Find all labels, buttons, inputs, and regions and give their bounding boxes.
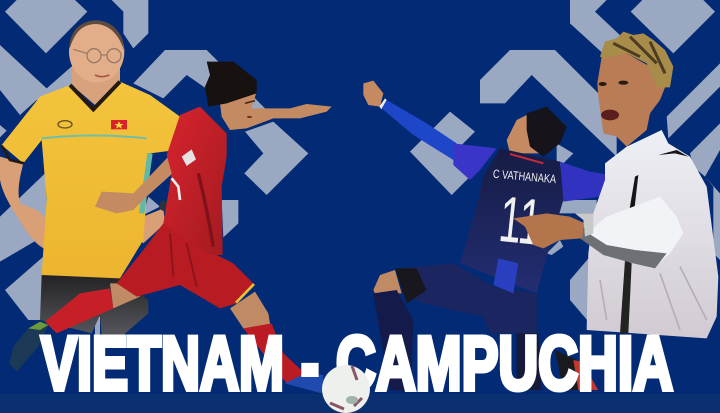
title xyxy=(41,322,673,406)
left coach figure xyxy=(0,21,180,335)
football xyxy=(322,365,370,413)
coach arms xyxy=(0,157,55,250)
coach hair xyxy=(600,32,673,87)
title: dash: - xyxy=(301,322,319,406)
coach glasses xyxy=(73,49,121,63)
coach watch xyxy=(159,200,170,211)
coach collar xyxy=(70,82,120,109)
player fist xyxy=(363,81,383,107)
player far leg xyxy=(517,333,542,390)
shirt flag badge xyxy=(111,120,127,129)
coach hand xyxy=(513,213,585,248)
player boots xyxy=(9,322,48,372)
player jersey xyxy=(163,107,227,255)
title: Vietnam: VIETNAM xyxy=(41,322,284,406)
player socks xyxy=(45,288,113,333)
right coach figure xyxy=(513,32,718,338)
background pattern: right chevrons xyxy=(410,0,720,323)
shirt folds xyxy=(600,267,707,330)
coach sleeve xyxy=(587,197,683,268)
coach shirt xyxy=(587,130,718,338)
coach eyes and mouth xyxy=(599,82,607,86)
coach shorts xyxy=(40,275,148,335)
bottom band xyxy=(0,394,720,413)
player sleeves xyxy=(453,143,497,180)
player neck and head xyxy=(507,115,540,153)
player shorts xyxy=(397,263,537,333)
background pattern: left chevrons xyxy=(0,0,308,343)
player arms xyxy=(247,104,332,128)
coach shirt xyxy=(2,82,180,278)
shirt logo xyxy=(58,121,72,128)
player hair xyxy=(205,62,257,107)
player legs xyxy=(110,283,140,308)
player boots xyxy=(555,350,580,390)
coach neck and head xyxy=(72,67,120,105)
gray cuff xyxy=(580,230,667,268)
player blue arm xyxy=(382,100,457,160)
player sock xyxy=(373,290,413,392)
player face xyxy=(220,92,257,130)
coach hair xyxy=(69,21,124,50)
red player figure xyxy=(9,62,332,393)
jersey number xyxy=(172,178,180,200)
coach watch xyxy=(575,213,593,237)
shirt stripe xyxy=(42,135,147,138)
jersey number: 11 xyxy=(496,182,545,259)
jersey badge xyxy=(182,149,196,166)
player jersey xyxy=(460,148,563,293)
player shorts xyxy=(117,223,255,308)
cambodia player figure xyxy=(363,81,610,392)
coach mouth xyxy=(95,75,109,77)
shirt black strips xyxy=(628,175,638,218)
coach sleeve trim xyxy=(2,146,24,163)
jersey name: C VATHANAKA xyxy=(492,167,557,186)
player thigh xyxy=(373,270,402,293)
coach face xyxy=(597,53,667,147)
